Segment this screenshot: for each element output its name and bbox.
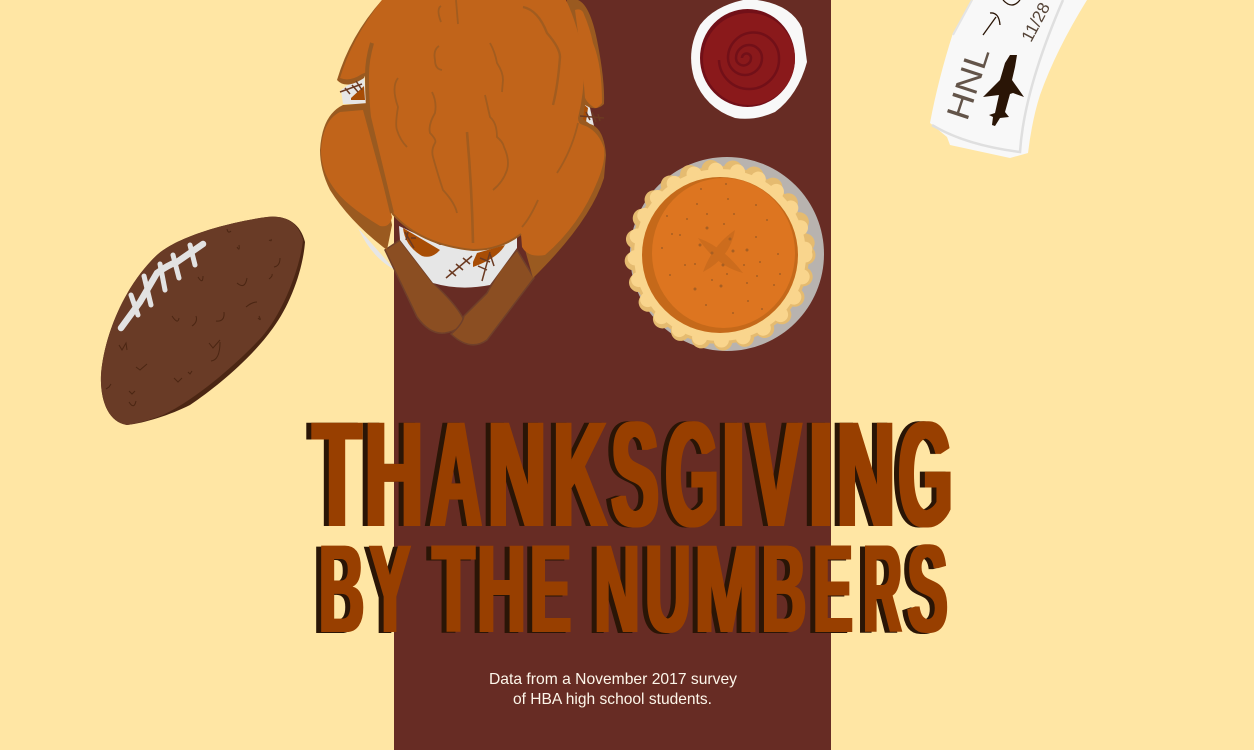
title line 1: T [313, 392, 361, 559]
title line 2: S [907, 519, 948, 659]
destination mark [1003, 0, 1020, 5]
title line 1: I [722, 390, 745, 558]
title line 2: R [864, 520, 901, 659]
laces [121, 244, 203, 328]
title line 1 shadow: A [426, 390, 476, 558]
title line 1: V [751, 392, 801, 559]
title line 1 shadow: H [360, 390, 418, 558]
icon: pumpkin pie [630, 157, 824, 351]
title line 2 shadow: R [859, 521, 896, 660]
title line 1 shadow: S [606, 390, 654, 558]
icon: plane ticket [930, 0, 1087, 158]
sauce spiral [719, 33, 779, 89]
icon: airplane [983, 55, 1024, 126]
title line 2 shadow: E [808, 520, 848, 660]
crust [635, 170, 805, 340]
title line 1: G [666, 391, 718, 558]
title line 2: B [319, 519, 364, 659]
title line 1 shadow: N [832, 390, 890, 558]
title line 2 shadow: E [525, 520, 566, 660]
flight date: 11/28 [1018, 0, 1054, 45]
title line 2: H [477, 520, 526, 659]
airport code: HNL [939, 43, 997, 124]
pie filling [642, 177, 798, 333]
title line 1: N [837, 390, 895, 558]
arrow [983, 13, 1000, 35]
title line 1 shadow: G [894, 390, 947, 558]
title line 1 shadow: G [661, 391, 713, 558]
title line 1 shadow [308, 390, 947, 559]
title line 2 shadow: N [589, 520, 635, 660]
title line 1: G [899, 390, 952, 558]
pie tin [630, 157, 824, 351]
title line 1 shadow: K [548, 391, 602, 559]
title line 1: N [488, 390, 546, 558]
title line 1: I [808, 391, 834, 558]
crust edge [634, 169, 806, 341]
title line 2 shadow [314, 520, 943, 660]
thigh and wing shading [320, 0, 606, 278]
icon: football [101, 217, 305, 425]
title line 2 shadow: B [757, 520, 801, 660]
title line 1 shadow: I [803, 391, 829, 558]
side sauce [351, 86, 588, 122]
title line 2: T [433, 520, 474, 659]
spice specks [661, 183, 781, 314]
title line 2 shadow: M [689, 520, 754, 660]
title line 1 shadow: N [483, 390, 541, 558]
title line 1 shadow: T [308, 392, 356, 559]
title line 2 shadow: S [902, 520, 943, 660]
drumsticks [385, 240, 534, 345]
front sauce [403, 228, 505, 267]
right wing [575, 9, 602, 108]
turkey body [340, 0, 604, 256]
title line 2 shadow: T [428, 521, 469, 660]
title line 2: E [813, 519, 853, 659]
front platter [399, 226, 517, 288]
title [308, 390, 952, 660]
title line 2: U [645, 519, 691, 659]
pastry leaves [698, 230, 743, 273]
title line 2 shadow: H [472, 521, 521, 660]
title line 2 shadow: Y [365, 520, 405, 660]
left thigh [321, 110, 392, 226]
title line 2 shadow: U [640, 520, 686, 660]
title line 2: Y [370, 519, 410, 659]
subtitle: of HBA high school students. [513, 691, 712, 708]
subtitle: Data from a November 2017 survey [489, 671, 737, 688]
body creases [367, 0, 578, 250]
title line 1: K [553, 391, 607, 559]
title line 2: N [594, 519, 640, 659]
icon: roast turkey [320, 0, 606, 345]
panel: table runner [394, 0, 831, 750]
title line 1: A [431, 390, 481, 558]
side platter pieces [341, 74, 594, 270]
title line 2 shadow: B [314, 520, 359, 660]
title line 2 [319, 519, 948, 659]
title line 2: E [530, 519, 571, 659]
title line 2: B [762, 519, 806, 659]
title line 1 shadow: V [746, 392, 796, 559]
icon: cranberry sauce bowl [691, 0, 807, 119]
ticket fold [932, 0, 1063, 152]
leather texture [106, 229, 280, 406]
title line 1 [313, 390, 952, 559]
title line 1: H [365, 390, 423, 558]
title line 1: S [611, 390, 659, 558]
title line 1 shadow: I [717, 390, 740, 558]
title line 2: M [694, 519, 759, 659]
subtitle [489, 671, 737, 708]
sprig garnish [340, 81, 604, 281]
